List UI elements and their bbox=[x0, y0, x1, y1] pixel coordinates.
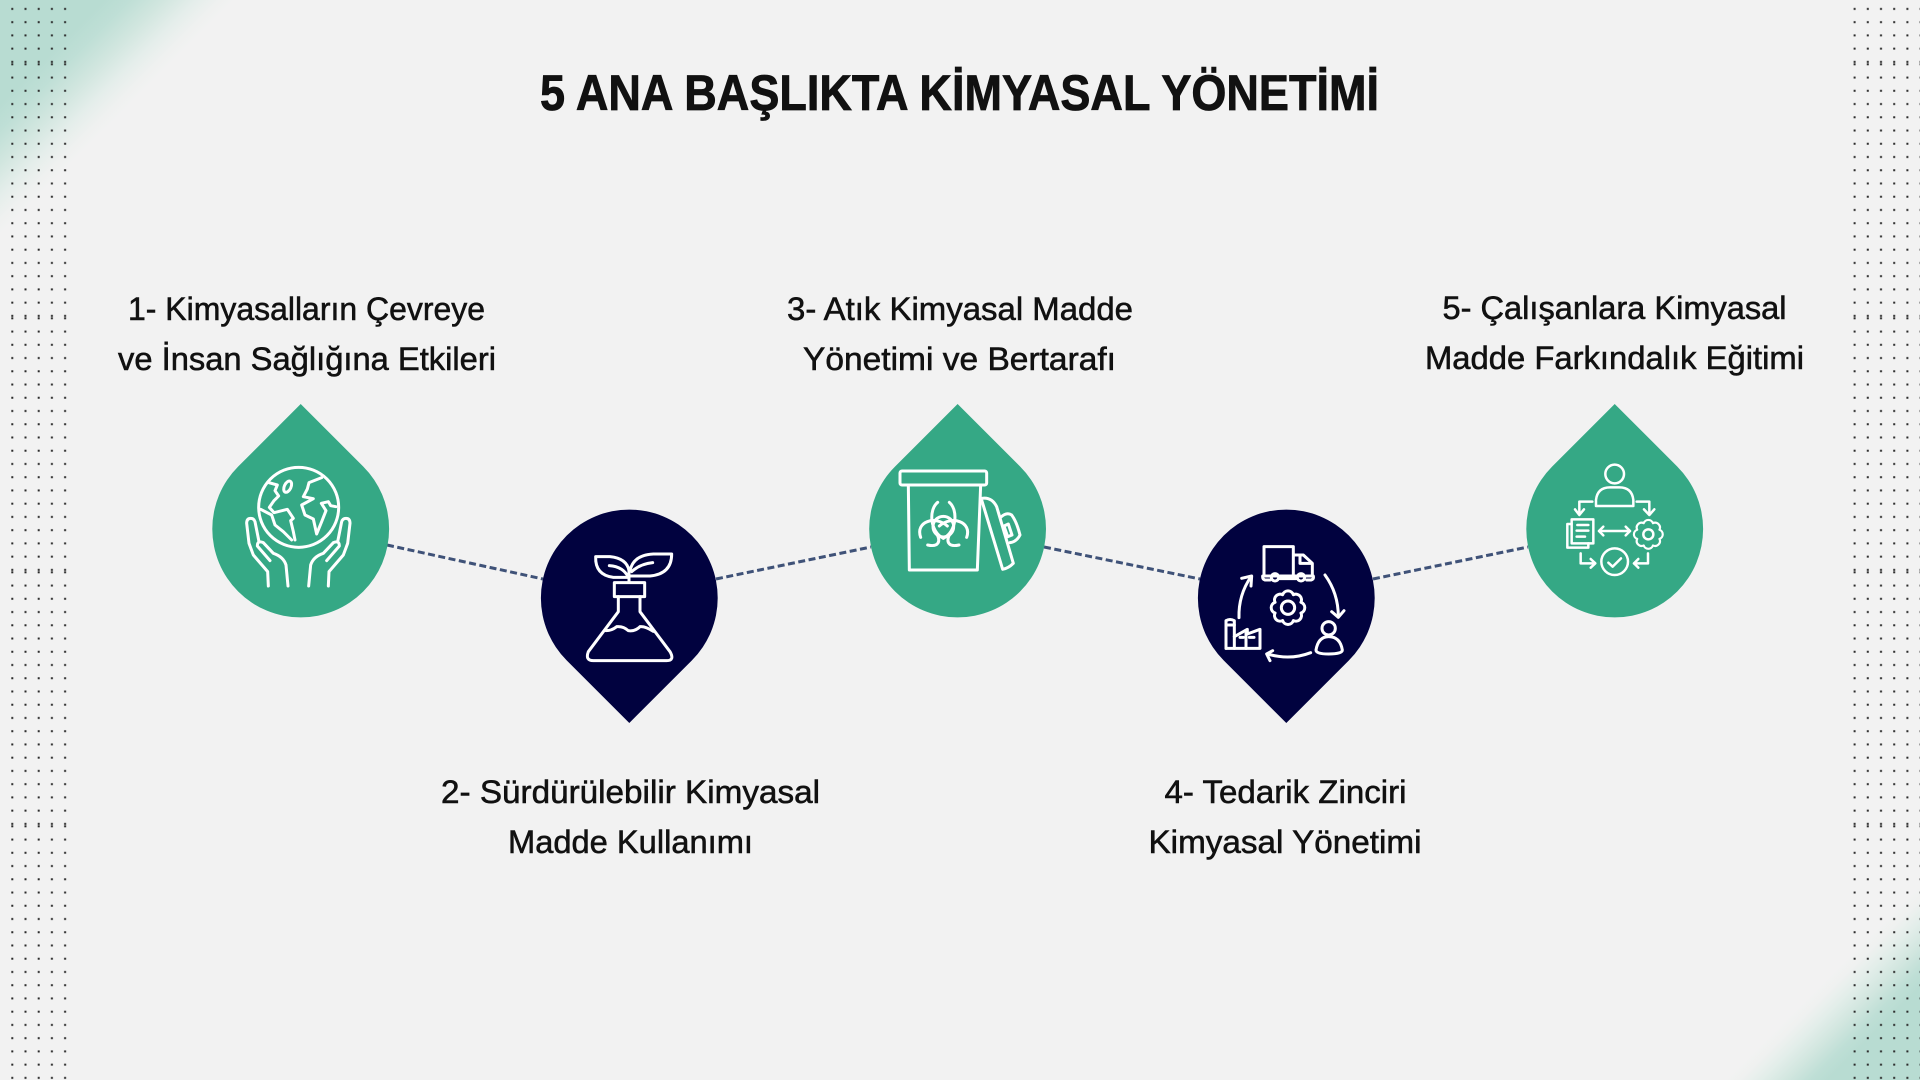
drop marker: step 2 bbox=[541, 510, 718, 723]
drop marker: step 5 bbox=[1526, 404, 1703, 617]
heading: step 1: 1- Kimyasalların Çevreye bbox=[128, 291, 485, 327]
heading: step 4: 4- Tedarik Zinciri bbox=[1164, 774, 1406, 810]
dot pattern: right strip bbox=[1848, 0, 1920, 1080]
heading: step 2: Madde Kullanımı bbox=[508, 824, 753, 860]
connector: step 3 to step 4 bbox=[1044, 547, 1200, 579]
heading: step 2: 2- Sürdürülebilir Kimyasal bbox=[441, 774, 820, 810]
dot pattern: left strip bbox=[6, 0, 72, 1080]
corner gradient: top left bbox=[0, 0, 300, 300]
drop marker: step 3 bbox=[869, 404, 1046, 617]
title: 5 ANA BAŞLIKTA KİMYASAL YÖNETİMİ bbox=[540, 65, 1379, 121]
icon: supply chain cycle bbox=[1226, 547, 1344, 661]
icon: hands holding globe bbox=[247, 467, 350, 586]
heading: step 5: Madde Farkındalık Eğitimi bbox=[1425, 340, 1804, 376]
heading: step 3: Yönetimi ve Bertarafı bbox=[803, 341, 1116, 377]
panel: step 2 bbox=[441, 510, 820, 860]
heading: step 5: 5- Çalışanlara Kimyasal bbox=[1442, 290, 1786, 326]
connector: step 4 to step 5 bbox=[1373, 547, 1528, 579]
drop marker: step 4 bbox=[1198, 510, 1375, 723]
connector: step 2 to step 3 bbox=[716, 547, 871, 579]
heading: step 2 bbox=[441, 774, 820, 860]
heading: step 5 bbox=[1425, 290, 1804, 376]
heading: step 4 bbox=[1148, 774, 1422, 860]
corner gradient: bottom right bbox=[1660, 820, 1920, 1080]
heading: step 1 bbox=[118, 291, 496, 377]
drop marker: step 1 bbox=[212, 404, 389, 617]
heading: step 3 bbox=[787, 291, 1133, 377]
panel: step 4 bbox=[1148, 510, 1422, 860]
panel: step 1 bbox=[118, 291, 496, 617]
heading: step 3: 3- Atık Kimyasal Madde bbox=[787, 291, 1133, 327]
panel: step 3 bbox=[787, 291, 1133, 617]
panel: step 5 bbox=[1425, 290, 1804, 617]
connector: step 1 to step 2 bbox=[387, 545, 543, 579]
icon: biohazard waste bin bbox=[900, 471, 1020, 570]
heading: step 4: Kimyasal Yönetimi bbox=[1148, 824, 1422, 860]
heading: step 1: ve İnsan Sağlığına Etkileri bbox=[118, 341, 496, 377]
icon: flask with plant bbox=[587, 554, 672, 661]
icon: worker training process bbox=[1567, 465, 1663, 575]
